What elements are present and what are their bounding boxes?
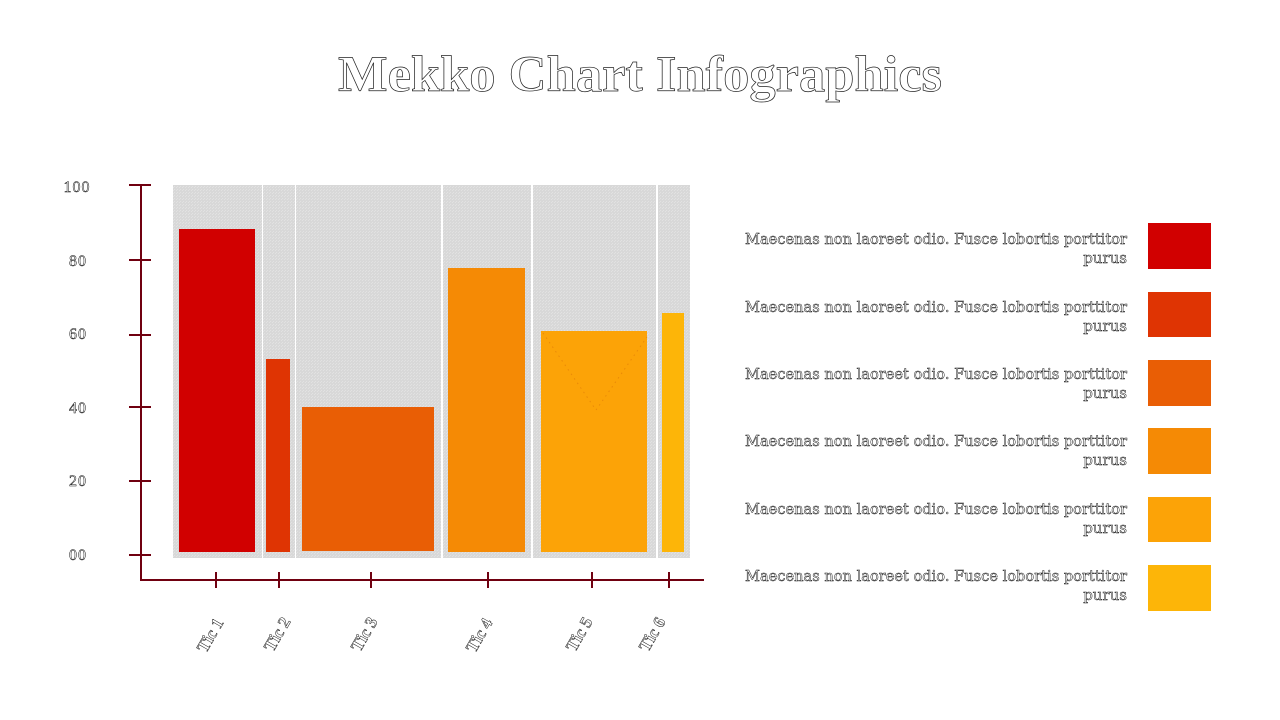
title: Mekko Chart Infographics <box>338 47 942 103</box>
x axis labels: Tic 5 <box>562 614 596 655</box>
y axis labels: 100 <box>64 179 90 196</box>
legend item 6: Maecenas non laoreet odio. Fusce lobortis porttitor <box>745 567 1128 585</box>
x axis labels: Tic 3 <box>347 614 381 655</box>
y axis labels: 80 <box>69 253 87 270</box>
x axis labels <box>193 614 669 656</box>
legend item 5: purus <box>1083 519 1127 537</box>
legend item 5: Maecenas non laoreet odio. Fusce lobortis porttitor <box>745 500 1128 518</box>
legend item 3: Maecenas non laoreet odio. Fusce lobortis porttitor <box>745 365 1128 383</box>
panel: mekko chart <box>64 179 704 656</box>
legend item 4 <box>745 428 1211 474</box>
y axis labels <box>64 179 90 564</box>
legend item 4: purus <box>1083 451 1127 469</box>
legend <box>745 223 1211 611</box>
chart background columns <box>173 185 690 558</box>
chart bars <box>179 229 684 552</box>
legend item 2 <box>745 292 1211 337</box>
faint dotted marker on bar 5 <box>543 333 647 410</box>
legend item 3: purus <box>1083 384 1127 402</box>
legend item 4: Maecenas non laoreet odio. Fusce lobortis porttitor <box>745 432 1128 450</box>
y axis labels: 00 <box>69 547 87 564</box>
x axis labels: Tic 4 <box>462 614 497 656</box>
legend item 2: Maecenas non laoreet odio. Fusce lobortis porttitor <box>745 298 1128 316</box>
legend item 6: purus <box>1083 586 1127 604</box>
y axis labels: 20 <box>69 473 87 490</box>
legend item 5 <box>745 497 1211 542</box>
axes and ticks <box>129 185 704 588</box>
y axis labels: 60 <box>69 326 87 343</box>
legend item 1: Maecenas non laoreet odio. Fusce lobortis porttitor <box>745 230 1128 248</box>
legend item 2: purus <box>1083 317 1127 335</box>
y axis labels: 40 <box>69 400 87 417</box>
legend item 3 <box>745 360 1211 406</box>
legend item 1 <box>745 223 1211 269</box>
x axis labels: Tic 1 <box>193 615 227 656</box>
x axis labels: Tic 2 <box>260 614 294 655</box>
legend item 6 <box>745 565 1211 611</box>
legend item 1: purus <box>1083 249 1127 267</box>
x axis labels: Tic 6 <box>635 614 669 655</box>
